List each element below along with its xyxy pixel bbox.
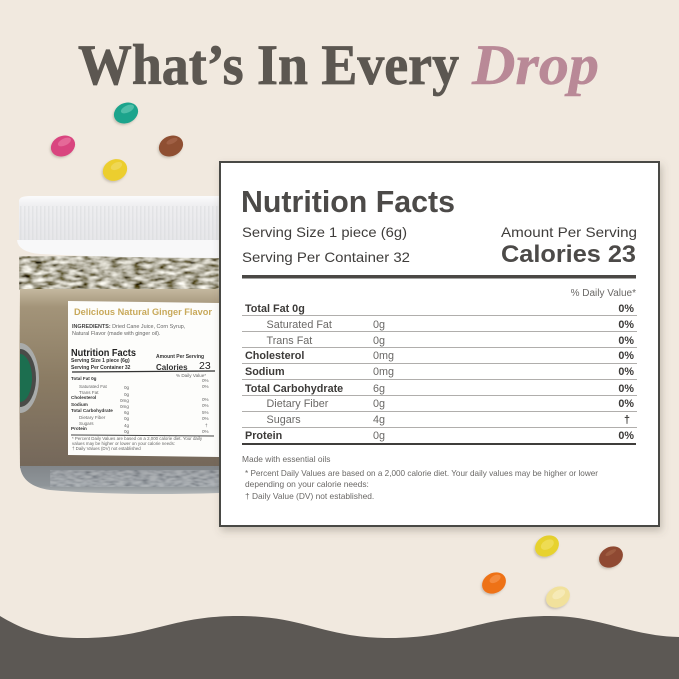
row: protein: 0g (373, 430, 385, 442)
row: sodium: 0% (618, 366, 634, 378)
title: What’s In Every (78, 34, 459, 97)
jar label: footnotes: values may be higher or lower on your calorie needs: (72, 441, 175, 446)
table bottom rule (242, 443, 636, 445)
footnotes: depending on your calorie needs: (245, 479, 369, 489)
serving information: Serving Per Container 32 (242, 249, 410, 265)
jar: glass base (20, 466, 219, 494)
jar: candy window (19, 256, 219, 290)
jar label: nutrient rows: 0g (124, 429, 130, 434)
row: total carbohydrate (245, 383, 634, 395)
jar label: nutrient rows: Protein (71, 426, 87, 431)
jar label: serving: Serving Size 1 piece (6g) (71, 358, 130, 364)
row: protein (245, 430, 634, 442)
candy: teal (110, 99, 142, 127)
jar label: nutrition facts heading: Nutrition Facts (71, 348, 136, 359)
jar label: nutrient rows: 0% (202, 429, 209, 434)
jar label: nutrient rows: 5% (202, 410, 209, 415)
serving information: Serving Size 1 piece (6g) (242, 224, 407, 240)
row: sodium: Sodium (245, 366, 285, 378)
jar: green seal badge (20, 343, 39, 413)
jar label: rule (72, 371, 215, 372)
jar label: footnotes: † Daily Values (DV) not established (72, 446, 141, 451)
footnotes: * Percent Daily Values are based on a 2,000 calorie diet. Your daily values may be higher or lower (245, 468, 598, 478)
row: cholesterol (245, 350, 634, 362)
jar label: nutrient rows: Dietary Fiber (79, 415, 106, 420)
card panel (220, 162, 659, 526)
jar label: serving: Serving Per Container 32 (71, 365, 131, 371)
jar label: nutrient rows: Trans Fat (79, 390, 99, 395)
jar label: serving (71, 354, 211, 372)
row: trans fat (266, 335, 634, 347)
jar label: nutrient rows: Saturated Fat (79, 384, 108, 389)
bottom wave (0, 616, 679, 679)
card heading: Nutrition Facts (241, 185, 455, 219)
row: dietary fiber (266, 398, 634, 410)
row: total fat (245, 303, 634, 315)
candy: pink (47, 132, 79, 160)
candy: pale yellow (542, 582, 574, 612)
candy: brown (595, 542, 627, 572)
jar (17, 196, 219, 494)
candy: yellow (531, 531, 563, 561)
jar label: nutrient rows: Total Carbohydrate (71, 408, 113, 413)
jar label: nutrient rows: 6g (124, 410, 130, 415)
jar label: nutrient rows: 0g (124, 416, 130, 421)
row: trans fat: 0% (618, 335, 634, 347)
jar label: nutrient rows: 0% (202, 384, 209, 389)
candy: brown (155, 132, 187, 160)
jar label: nutrient rows: 0g (124, 385, 130, 390)
row: cholesterol: 0% (618, 350, 634, 362)
table row lines (242, 316, 637, 428)
row: dietary fiber: Dietary Fiber (266, 398, 329, 410)
jar: lid (17, 196, 219, 258)
row: dietary fiber: 0g (373, 398, 385, 410)
jar: brown label wrap (20, 289, 219, 468)
jar label: nutrient rows (71, 373, 209, 434)
jar label: ingredients: INGREDIENTS: Dried Cane Juice, Corn Syrup, (72, 324, 186, 330)
jar label: serving: Amount Per Serving (156, 354, 204, 360)
row: cholesterol: 0mg (373, 350, 394, 362)
jar label: ingredients (72, 324, 186, 337)
jar label: nutrient rows: Cholesterol (71, 395, 96, 400)
row: total fat: Total Fat 0g (245, 303, 305, 315)
jar label: nutrient rows: 0mg (120, 398, 129, 403)
nutrient table (242, 303, 637, 442)
candy drops: top group (47, 99, 187, 185)
jar label: nutrient rows: 0% (202, 416, 209, 421)
footnotes (245, 468, 598, 501)
row: sugars (266, 414, 630, 426)
jar label: footnotes (72, 436, 203, 451)
row: total carbohydrate: 0% (618, 383, 634, 395)
candy: orange (478, 568, 510, 598)
amount per serving: Amount Per Serving (501, 224, 637, 240)
jar label: nutrient rows: 0% (202, 378, 209, 383)
row: dietary fiber: 0% (618, 398, 634, 410)
row: trans fat: 0g (373, 335, 385, 347)
thick rule (242, 275, 636, 278)
row: sodium (245, 366, 634, 378)
row: saturated fat: 0% (618, 319, 634, 331)
jar label: ingredients: Natural Flavor (made with ginger oil). (72, 331, 160, 337)
row: total carbohydrate: 6g (373, 383, 385, 395)
row: saturated fat: 0g (373, 319, 385, 331)
jar label: nutrient rows: 4g (124, 423, 130, 428)
row: saturated fat: Saturated Fat (266, 319, 332, 331)
jar label: nutrient rows: 0% (202, 403, 209, 408)
candy: yellow (99, 155, 131, 185)
footnotes: † Daily Value (DV) not established. (245, 491, 374, 501)
row: sodium: 0mg (373, 366, 394, 378)
row: total carbohydrate: Total Carbohydrate (245, 383, 343, 395)
jar label: serving: Calories (156, 363, 188, 372)
row: protein: Protein (245, 430, 282, 442)
jar label: nutrient rows: Sugars (79, 421, 94, 426)
candy drops: bottom group (478, 531, 627, 612)
row: trans fat: Trans Fat (266, 335, 312, 347)
jar label: nutrient rows: 0% (202, 397, 209, 402)
jar label: serving: 23 (199, 360, 211, 372)
row: total fat: 0% (618, 303, 634, 315)
row: cholesterol: Cholesterol (245, 350, 304, 362)
row: sugars: † (624, 414, 630, 426)
jar label: nutrient rows: % Daily Value* (176, 373, 206, 378)
jar label: nutrient rows: Total Fat 0g (71, 376, 97, 381)
row: saturated fat (266, 319, 634, 331)
nutrition facts card (220, 162, 659, 526)
jar label: nutrient rows: Sodium (71, 402, 88, 407)
jar label: footnotes: * Percent Daily Values are based on a 2,000 calorie diet. Your daily (72, 436, 203, 441)
row: sugars: 4g (373, 414, 385, 426)
jar: white product label (68, 301, 219, 457)
row: protein: 0% (618, 430, 634, 442)
jar label: nutrient rows: 0mg (120, 404, 129, 409)
made with note: Made with essential oils (242, 454, 330, 464)
title accent word: Drop (471, 34, 599, 97)
jar label: nutrient rows: † (205, 423, 208, 428)
row: sugars: Sugars (266, 414, 301, 426)
serving information (242, 224, 410, 265)
jar label: nutrient rows: 0g (124, 392, 130, 397)
jar label: flavor heading: Delicious Natural Ginger Flavor (74, 307, 213, 317)
calories: Calories 23 (501, 241, 636, 268)
jar: base candy texture (50, 470, 219, 487)
jar label: rule bottom (71, 435, 214, 436)
daily value header: % Daily Value* (571, 288, 636, 299)
